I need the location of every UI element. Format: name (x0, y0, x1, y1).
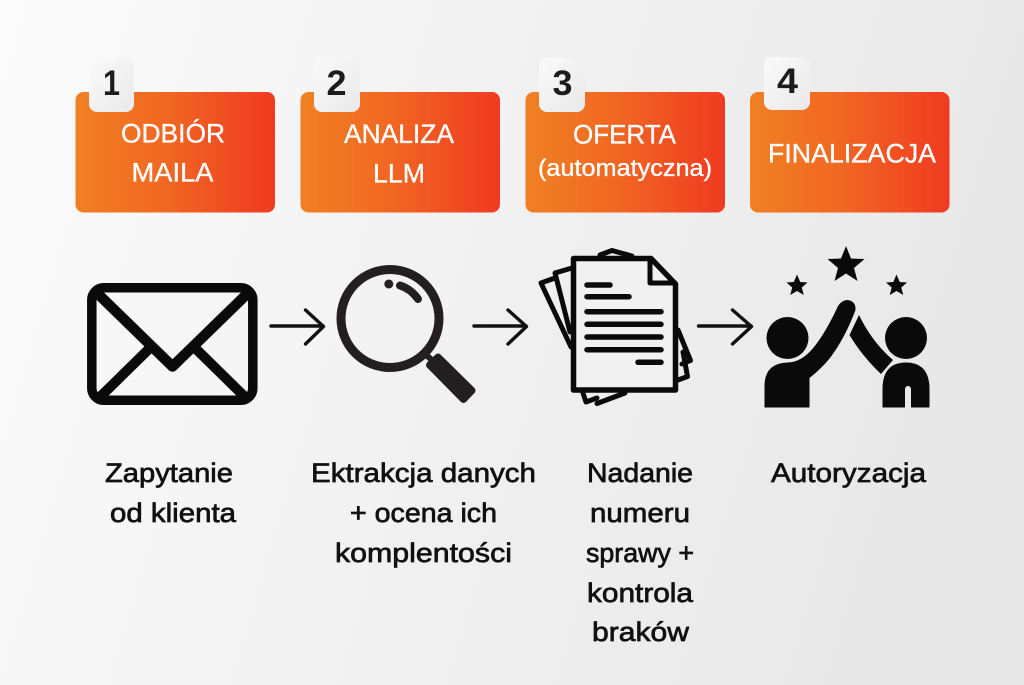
arrow: step 3 to 4 (698, 310, 752, 344)
caption: step 3: sprawy + (586, 538, 694, 568)
caption: step 4: Autoryzacja (771, 458, 927, 488)
caption: step 2: Ektrakcja danych (311, 458, 536, 488)
caption: step 3: braków (592, 617, 690, 647)
icon: magnifying glass (341, 270, 472, 400)
step 1 title: ODBIÓR (121, 118, 225, 148)
caption: step 3: numeru (590, 498, 690, 528)
step 2 number badge (314, 58, 360, 112)
step 2 card (300, 58, 500, 212)
step 1 card (76, 58, 275, 212)
star left (786, 274, 808, 295)
step 4 title: FINALIZACJA (768, 138, 936, 168)
caption: step 2: + ocena ich (350, 498, 497, 528)
step 2 title: ANALIZA (344, 119, 454, 149)
step 1 number: 1 (103, 64, 120, 103)
step 4 number badge (764, 57, 810, 110)
icon: envelope (92, 288, 253, 400)
step 2 title: LLM (373, 158, 425, 188)
icon: documents (541, 250, 690, 404)
caption: step 3: Nadanie (587, 458, 693, 488)
arrow: step 1 to 2 (271, 310, 324, 344)
step 1 title: MAILA (132, 158, 214, 188)
step 3 number badge (539, 58, 585, 112)
caption: step 3: kontrola (587, 578, 694, 608)
left person (766, 317, 808, 359)
caption: step 1: Zapytanie (105, 458, 233, 488)
arrow: step 2 to 3 (474, 310, 526, 344)
step 3 title: (automatyczna) (538, 155, 712, 182)
step 3 number: 3 (552, 64, 572, 103)
step 4 card (750, 57, 950, 212)
step 3 title: OFERTA (573, 120, 676, 150)
caption: step 1: od klienta (110, 498, 237, 528)
step 4 number: 4 (777, 62, 799, 101)
star large (828, 246, 864, 281)
caption: step 2: komplentości (335, 538, 512, 568)
step 1 number badge (89, 58, 134, 112)
star right (886, 274, 907, 295)
right person (885, 317, 927, 359)
icon: high five with stars (764, 246, 930, 408)
step 3 card (526, 58, 725, 212)
step 2 number: 2 (326, 64, 346, 103)
